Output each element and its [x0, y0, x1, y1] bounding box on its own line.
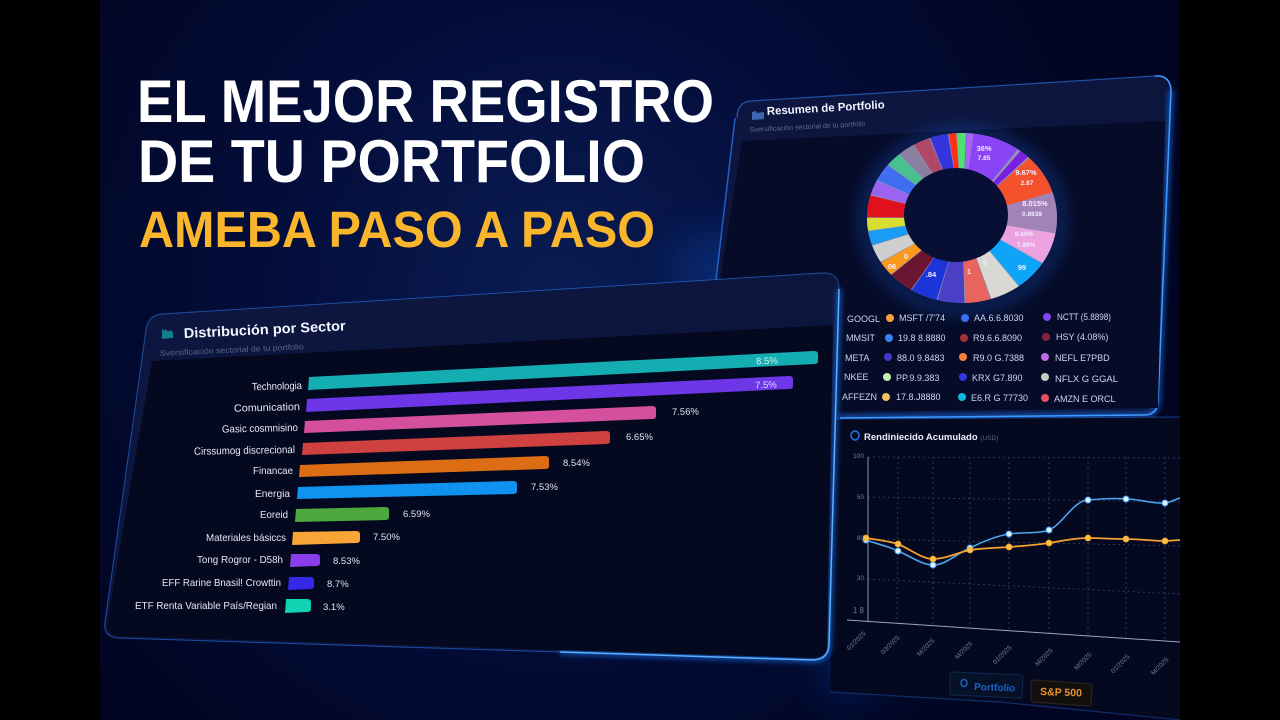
bar: consumo discrecional [194, 431, 653, 458]
heading: resumen de portfolio: Resumen de Portfolio [766, 99, 885, 118]
bar: eoreid: Eoreid [260, 509, 288, 521]
bar: materiales básicos [206, 531, 400, 545]
legend button: s&p 500 [1031, 680, 1092, 706]
donut labels: .84 [926, 270, 937, 279]
bar: tong: Tong Rogror - D58h [197, 554, 283, 566]
legend row 5: 17.8.J8880 [896, 392, 941, 402]
donut labels: 99 [1018, 263, 1026, 272]
s&p line [863, 535, 1180, 562]
inner dark area [720, 121, 1165, 412]
legend row 5: E6.R G 77730 [971, 393, 1028, 403]
x labels: M/2025 [954, 640, 975, 661]
legend row 5: AMZN E ORCL [1054, 394, 1116, 404]
donut chart [863, 129, 1061, 308]
bar: eoreid [260, 507, 430, 522]
donut labels: 9.80% [1015, 231, 1033, 238]
grid [868, 457, 1180, 641]
bar: consumo discrecional: Cirssumog discrecional [194, 444, 295, 458]
legend row 5: AFFEZN [842, 392, 877, 402]
subtitle: Sversificación sectorial de tu portfolio [160, 342, 305, 358]
y labels: 1 8 [853, 606, 865, 615]
bar: consumo discrecional: 6.65% [626, 432, 653, 443]
y labels: 30 [857, 575, 864, 582]
x labels: M/2025 [1150, 656, 1171, 677]
x labels: 03/2025 [880, 634, 902, 656]
bar: etf [135, 599, 345, 613]
legend row 5 [842, 392, 1116, 404]
legend row 3: R9.0 G.7388 [973, 353, 1024, 363]
bar: comunicación: Comunication [234, 401, 300, 415]
legend row 1: NCTT (5.8898) [1057, 312, 1111, 322]
bar: materiales básicos: 7.50% [373, 532, 400, 543]
y labels: 80 [857, 535, 864, 542]
donut labels: 6 [983, 258, 987, 267]
x labels [846, 630, 1171, 677]
x labels: M/2025 [1034, 647, 1055, 668]
legend row 2: MMSIT [846, 333, 875, 343]
legend row 3: NEFL E7PBD [1055, 353, 1110, 363]
bar: comunicación: 7.5% [755, 380, 777, 391]
bar chart [135, 351, 818, 613]
bar: tong [197, 554, 360, 567]
bar: finanzas [253, 456, 590, 477]
legend row 1: AA.6.6.8030 [974, 313, 1024, 323]
legend row 2 [846, 332, 1108, 343]
bar: eff: 8.7% [327, 579, 349, 590]
heading: rendimiento: Rendiniecido Acumulado (USD) [864, 432, 998, 443]
legend row 1: GOOGL [847, 314, 880, 324]
y labels [853, 453, 865, 615]
icon: factory [162, 329, 173, 339]
title [137, 68, 714, 258]
legend button: portfolio: Portfolio [974, 682, 1015, 694]
bar: energía: Energia [255, 488, 290, 500]
donut labels: 2.87 [1021, 180, 1034, 187]
legend row 2: R9.6.6.8090 [973, 333, 1022, 343]
bar: tecnología: 8.5% [756, 356, 778, 367]
title line 3: AMEBA PASO A PASO [139, 201, 655, 258]
portfolio line [863, 496, 1180, 568]
bar: etf: ETF Renta Variable País/Regian [135, 600, 277, 612]
y labels: 50 [857, 494, 864, 501]
x labels: M/2025 [916, 637, 937, 658]
legend row 2: HSY (4.08%) [1056, 332, 1108, 342]
legend row 3: META [845, 353, 869, 363]
inner dark area [107, 325, 833, 658]
legend row 2: 19.8 8.8880 [898, 333, 946, 343]
panel: distribución por sector [105, 273, 839, 660]
bar: finanzas: 8.54% [563, 458, 590, 469]
donut labels: 36% [976, 144, 992, 153]
donut labels [888, 144, 1048, 279]
bar: materiales básicos: Materiales básiccs [206, 532, 286, 544]
donut labels: 06 [888, 262, 896, 271]
legend row 4: NFLX G GGAL [1055, 374, 1118, 384]
bar: etf: 3.1% [323, 602, 345, 613]
bar: gasic: Gasic cosmnisino [222, 422, 298, 436]
bar: finanzas: Financae [253, 465, 293, 477]
line chart [846, 453, 1180, 677]
donut labels: 7.80% [1017, 242, 1035, 249]
donut labels: 1 [967, 267, 971, 276]
donut labels: 0 [904, 252, 908, 261]
donut labels: 9.67% [1015, 168, 1037, 177]
heading: distribución por sector: Distribución por Sector [183, 317, 347, 341]
bar: gasic: 7.56% [672, 407, 700, 418]
legend button: s&p 500: S&P 500 [1040, 686, 1082, 699]
donut labels: 0.8638 [1022, 211, 1042, 218]
title line 2: DE TU PORTFOLIO [138, 128, 645, 195]
legend row 3 [845, 353, 1110, 363]
legend button: portfolio [950, 672, 1023, 698]
bar: gasic [222, 406, 700, 436]
legend row 4: PP.9.9.383 [896, 373, 939, 383]
legend [842, 312, 1118, 404]
x labels: 01/2025 [1110, 653, 1132, 675]
donut hole [904, 168, 1008, 262]
title line 1: EL MEJOR REGISTRO [137, 68, 714, 135]
bar: energía: 7.53% [531, 482, 558, 493]
panel: rendimiento acumulado [830, 417, 1180, 720]
x labels: 01/2025 [992, 644, 1014, 666]
legend row 4 [844, 372, 1118, 384]
donut labels: 7.85 [978, 155, 991, 162]
x labels: M/2025 [1073, 651, 1094, 672]
x labels: 01/2025 [846, 630, 868, 652]
legend row 3: 88.0 9.8483 [897, 353, 945, 363]
y labels: 100 [853, 453, 864, 460]
axes [867, 457, 869, 621]
donut labels: 8.015% [1022, 199, 1048, 208]
bar: eoreid: 6.59% [403, 509, 430, 520]
bar: tecnología: Technologia [252, 380, 302, 393]
subtitle: Sversificación sectorial de tu portfolio [750, 121, 866, 134]
bar: tong: 8.53% [333, 556, 360, 567]
legend row 1: MSFT /7'74 [899, 313, 945, 323]
legend row 1 [847, 312, 1111, 324]
icon: folder [752, 111, 764, 120]
bar: eff: EFF Rarine Bnasil! Crowttin [162, 577, 281, 589]
legend row 4: KRX G7.890 [972, 373, 1023, 383]
panel: resumen de portfolio [700, 76, 1171, 420]
legend row 4: NKEE [844, 372, 869, 382]
bar: comunicación [234, 376, 793, 415]
bar: eff [162, 577, 349, 590]
bar: tecnología [252, 351, 818, 393]
bar: energía [255, 481, 558, 500]
icon: ring [851, 431, 859, 440]
